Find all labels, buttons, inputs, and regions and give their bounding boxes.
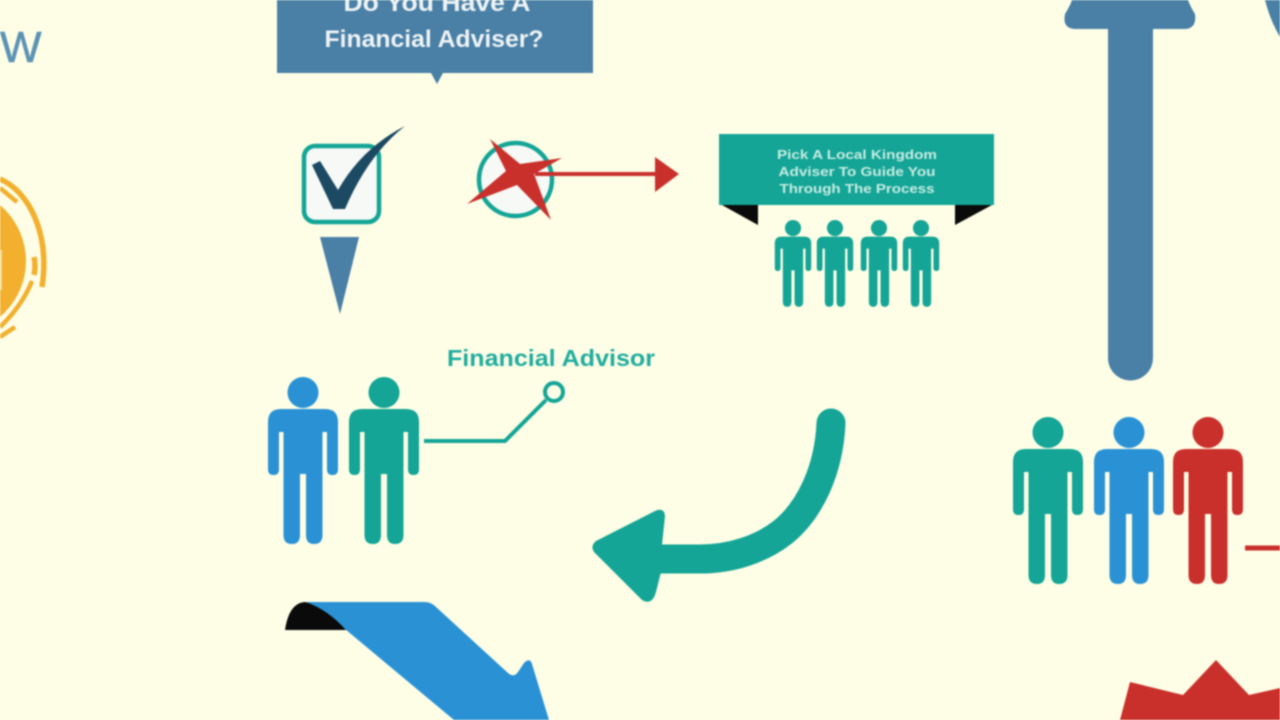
panel: local kingdom adviser banner: Pick A Local Kingdom [777,148,937,162]
callout: do you have a financial adviser: Financial Adviser? [324,26,544,53]
panel: local kingdom adviser banner: Adviser To Guide You [778,165,936,179]
panel: local kingdom adviser banner: Through The Process [780,182,935,196]
arrow: teal curved arrow [592,423,831,602]
icon: teal, blue and red people [1013,417,1243,584]
connector: advisor label line [424,383,563,441]
arrow: steel blue upward column [1064,0,1195,381]
callout: do you have a financial adviser [277,0,593,84]
connector: red line from red figure [1245,546,1280,550]
label: financial advisor: Financial Advisor [447,345,655,371]
partial heading letter: W [0,23,42,72]
arrow: down triangle from check box [320,237,359,314]
icon: check box [304,126,405,222]
icon: yellow circular emblem [0,179,44,337]
arrow: blue ribbon arrow [285,602,549,720]
shape: top right curved corner [1265,0,1280,37]
shape: red crown [1120,660,1280,720]
icon: red cross over circle with arrow [467,139,679,220]
panel: local kingdom adviser banner [719,134,994,225]
icon: client and advisor figures [268,377,419,544]
icon: four teal people [775,220,939,307]
